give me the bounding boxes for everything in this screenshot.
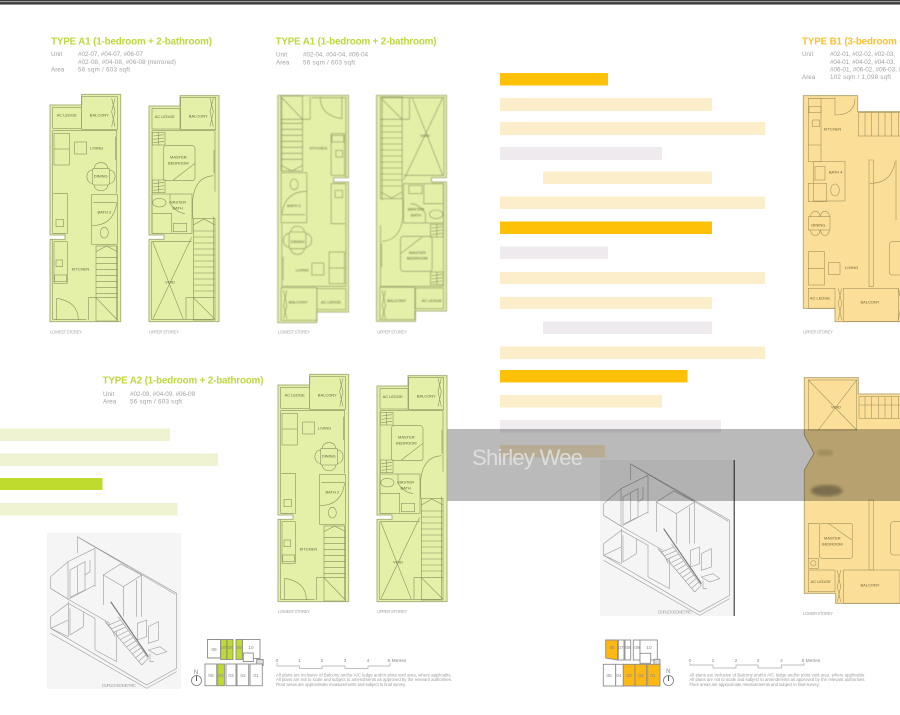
text block: notes right: All plans are inclusive of Balcony and/or A/C ledge and/or plots void area, where applicable. xyxy=(690,672,866,678)
floor plan: upper storey: MASTER xyxy=(169,200,186,205)
caption: upper storey: UPPER STOREY xyxy=(377,609,407,614)
text block: type B1 details: #02-01, #02-02, #02-03, xyxy=(830,51,895,58)
scale bar right: 0 xyxy=(689,658,692,664)
scale bar right: 5 Metres xyxy=(802,658,821,664)
key plan: amber units: 10 xyxy=(646,645,652,651)
key plan: amber units: 09 xyxy=(634,645,640,651)
key plan: green units: 02 xyxy=(240,673,246,679)
floor plan: upper storey: MASTER xyxy=(398,435,415,440)
text block: unit and area details: #02-08, #04-08, #06-08 (mirrored) xyxy=(78,59,176,66)
floor plan: lowest storey rotated: KITCHEN xyxy=(310,145,327,150)
key plan: amber units: 06 xyxy=(609,645,615,651)
floor plan: B1 lower storey: BALCONY xyxy=(860,582,880,587)
floor plan: upper storey xyxy=(149,96,219,322)
floor plan: lowest storey xyxy=(278,374,349,602)
key plan: amber units: 03 xyxy=(626,673,632,679)
panel: type A2 xyxy=(102,374,447,614)
floor plan: B1 upper storey: KITCHEN xyxy=(824,126,841,131)
scale bar right: 3 xyxy=(757,658,760,664)
floor plan: B1 upper storey: BATH 4 xyxy=(829,170,843,175)
text block: notes right xyxy=(690,672,866,687)
caption: duplex isometric: DUPLEX ISOMETRIC xyxy=(102,683,136,688)
key plan: amber units: 07 xyxy=(618,645,624,651)
floor plan: upper storey rotated: AC LEDGE xyxy=(422,298,442,303)
key plan: green units: 09 xyxy=(237,645,242,651)
floor plan: upper storey: VOID xyxy=(393,559,403,564)
floor plan: lowest storey: DINING xyxy=(94,173,108,178)
scale bar left: 3 xyxy=(344,658,347,664)
text block: type A2 details: Unit xyxy=(103,391,114,398)
watermark name: Shirley Wee xyxy=(472,445,583,470)
key plan: green units: 04 xyxy=(218,673,224,679)
heading: type A1: TYPE A1 (1-bedroom + 2-bathroom) xyxy=(51,36,212,48)
caption: upper storey: UPPER STOREY xyxy=(803,330,833,334)
floor plan: lowest storey: KITCHEN xyxy=(72,267,89,272)
floor plan: lowest storey: BATH 2 xyxy=(326,490,340,495)
icon: north arrow right: N xyxy=(666,669,670,675)
caption: lowest storey: LOWEST STOREY xyxy=(278,609,310,614)
icon: north arrow left xyxy=(192,670,202,686)
key plan: green units: 07 xyxy=(221,645,227,651)
floor plan: upper storey: BATH xyxy=(400,486,411,491)
floor plan: lowest storey rotated: LIVING xyxy=(296,267,309,272)
floor plan: lowest storey rotated: AC LEDGE xyxy=(321,300,341,305)
floor plan: B1 upper storey xyxy=(803,96,900,322)
floor plan: upper storey: AC LEDGE xyxy=(383,394,403,399)
text block: notes right: All plans are not to scale and subject to amendments as approved by the relevant authorities. xyxy=(690,677,866,682)
floor plan: lowest storey: LIVING xyxy=(318,426,331,431)
text block: unit 04 details xyxy=(276,52,368,66)
key plan: green units: 03 xyxy=(228,673,234,679)
text block: notes right: Floor areas are approximate measurements and subject to final survey. xyxy=(690,682,820,687)
scale bar right: 4 xyxy=(780,658,783,664)
floor plan: B1 upper storey: AC LEDGE xyxy=(810,296,830,301)
heading: type A1 unit 04: TYPE A1 (1-bedroom + 2-bathroom) xyxy=(276,36,436,48)
floor plan: upper storey rotated: BEDROOM xyxy=(407,256,428,261)
floor plan: upper storey rotated: VOID xyxy=(420,133,430,138)
floor plan: upper storey: VOID xyxy=(165,279,175,284)
scale bar left: 0 xyxy=(276,658,279,664)
caption: upper storey: UPPER STOREY xyxy=(377,330,407,334)
icon: north arrow left: N xyxy=(194,670,198,676)
scale bar right xyxy=(689,658,821,668)
text block: notes left: All plans are not to scale and subject to amendments as approved by the relevant authorities. xyxy=(276,677,452,682)
key plan: amber units: 08 xyxy=(625,645,631,651)
scale bar right: 1 xyxy=(712,658,715,664)
scale bar right: 2 xyxy=(735,658,738,664)
text block: type B1 details: 102 sqm / 1,098 sqft xyxy=(830,74,891,81)
caption: upper storey: UPPER STOREY xyxy=(149,330,179,334)
key plan: green units: 01 xyxy=(253,673,259,679)
text block: type A2 details: 56 sqm / 603 sqft xyxy=(130,398,182,406)
panel: right duplex isometric xyxy=(600,460,735,616)
text block: unit 04 details: Area xyxy=(276,60,290,66)
isometric drawing xyxy=(51,537,177,688)
floor plan: upper storey rotated xyxy=(377,95,447,321)
floor plan: lowest storey rotated: BATH 2 xyxy=(287,203,302,208)
caption: lowest storey: LOWEST STOREY xyxy=(278,330,310,334)
floor plan: upper storey rotated: BALCONY xyxy=(387,298,407,303)
floor plan: B1 upper storey: LIVING xyxy=(845,265,858,270)
caption: duplex isometric: DUPLEX ISOMETRIC xyxy=(658,610,692,614)
floor plan: upper storey: MASTER xyxy=(170,155,187,160)
scale bar left: 2 xyxy=(321,658,324,664)
text block: type A2 details xyxy=(103,391,195,406)
text block: type B1 details: #06-01, #06-02, #06-03, # xyxy=(830,66,900,74)
floor plan: lowest storey: LIVING xyxy=(90,146,103,151)
floor plan: lowest storey: KITCHEN xyxy=(300,547,317,552)
redacted green text bars xyxy=(0,428,218,516)
caption: lower storey: LOWER STOREY xyxy=(803,611,833,616)
floor plan: B1 lower storey: BEDROOM xyxy=(822,542,843,547)
caption: lowest storey: LOWEST STOREY xyxy=(50,330,82,334)
floor plan: B1 lower storey: MASTER xyxy=(824,536,841,541)
text block: unit and area details: Unit xyxy=(51,51,62,58)
watermark band xyxy=(448,429,900,501)
floor plan: B1 lower storey: VOID xyxy=(831,405,841,410)
floor plan: B1 upper storey: DINING xyxy=(811,222,825,227)
text block: notes left: Floor areas are approximate measurements and subject to final survey. xyxy=(276,682,406,687)
scale bar left: 1 xyxy=(298,658,301,664)
panel: type A1 units 07 and 08 xyxy=(50,36,219,334)
floor plan: upper storey: BALCONY xyxy=(417,394,436,399)
floor plan: lowest storey: BALCONY xyxy=(90,113,109,118)
floor plan: upper storey rotated: BATH xyxy=(411,212,421,217)
floor plan: upper storey: BEDROOM xyxy=(396,441,417,446)
floor plan: B1 lower storey xyxy=(804,378,900,603)
text block: unit and area details xyxy=(51,51,176,74)
text block: unit 04 details: Unit xyxy=(276,52,287,58)
text block: unit 04 details: 56 sqm / 603 sqft xyxy=(303,60,355,66)
scale bar left: 5 Metres xyxy=(388,658,407,664)
text block: type A2 details: Area xyxy=(103,398,117,406)
floor plan: lowest storey: DINING xyxy=(322,453,336,458)
heading: type A2: TYPE A2 (1-bedroom + 2-bathroom) xyxy=(102,376,264,386)
floor plan: lowest storey: BALCONY xyxy=(318,393,337,398)
text block: notes left xyxy=(276,672,452,687)
floor plan: upper storey: BATH xyxy=(172,206,183,211)
text block: type A2 details: #02-09, #04-09, #06-09 xyxy=(130,391,195,398)
text block: notes left: All plans are inclusive of Balcony and/or A/C ledge and/or plots void area, where applicable. xyxy=(276,672,452,678)
key plan: amber units xyxy=(603,640,660,686)
text block: unit and area details: 56 sqm / 603 sqft xyxy=(78,66,130,74)
floor plan: lowest storey rotated: BALCONY xyxy=(289,300,308,305)
text block: unit 04 details: #02-04, #04-04, #06-04 xyxy=(303,52,368,58)
key plan: amber units: 05 xyxy=(606,673,612,679)
floor plan: lowest storey: AC LEDGE xyxy=(285,393,305,398)
floor plan: lowest storey xyxy=(50,94,121,322)
redacted amber and grey text bars xyxy=(500,73,765,458)
key plan: green units: 06 xyxy=(211,647,217,653)
floor plan: upper storey: BEDROOM xyxy=(168,161,189,166)
key plan: green units: 05 xyxy=(208,673,214,679)
text block: type B1 details: Area xyxy=(802,74,816,81)
text block: type B1 details xyxy=(802,51,900,81)
floor plan: upper storey rotated: MASTER xyxy=(409,250,426,255)
key plan: green units xyxy=(205,640,263,686)
panel: left duplex isometric xyxy=(47,533,181,689)
key plan: green units: 08 xyxy=(227,645,233,651)
text block: unit and area details: #02-07, #04-07, #06-07 xyxy=(78,51,143,58)
top border stripes xyxy=(0,0,900,5)
floor plan: upper storey xyxy=(377,376,447,602)
floor plan: B1 upper storey: BALCONY xyxy=(860,300,880,305)
floor plan: lowest storey rotated: DINING xyxy=(291,239,305,244)
floor plan: B1 lower storey: AC LEDGE xyxy=(811,579,831,584)
vertical black rule xyxy=(734,460,735,616)
floor plan: upper storey: AC LEDGE xyxy=(155,114,175,119)
isometric drawing xyxy=(604,464,730,615)
key plan: amber units: 04 xyxy=(616,673,622,679)
scale bar left xyxy=(276,658,407,668)
scale bar left: 4 xyxy=(367,658,370,664)
key plan: green units: 10 xyxy=(248,645,254,651)
text block: type B1 details: #04-01, #04-02, #04-03, xyxy=(830,59,895,66)
floor plan: lowest storey: BATH 2 xyxy=(98,210,112,215)
panel: type A1 unit 04 xyxy=(276,36,447,334)
floor plan: upper storey: BALCONY xyxy=(189,114,208,119)
key plan: amber units: 02 xyxy=(638,673,644,679)
text block: unit and area details: Area xyxy=(51,66,65,74)
icon: north arrow right xyxy=(664,669,674,686)
floor plan: lowest storey: AC LEDGE xyxy=(57,113,77,118)
text block: type B1 details: Unit xyxy=(802,51,813,58)
panel: type B1 xyxy=(802,36,900,616)
floor plan: lowest storey rotated xyxy=(278,95,349,323)
floor plan: upper storey rotated: MASTER xyxy=(408,207,424,212)
key plan: amber units: 01 xyxy=(650,673,656,679)
floor plan: upper storey: MASTER xyxy=(397,480,414,485)
